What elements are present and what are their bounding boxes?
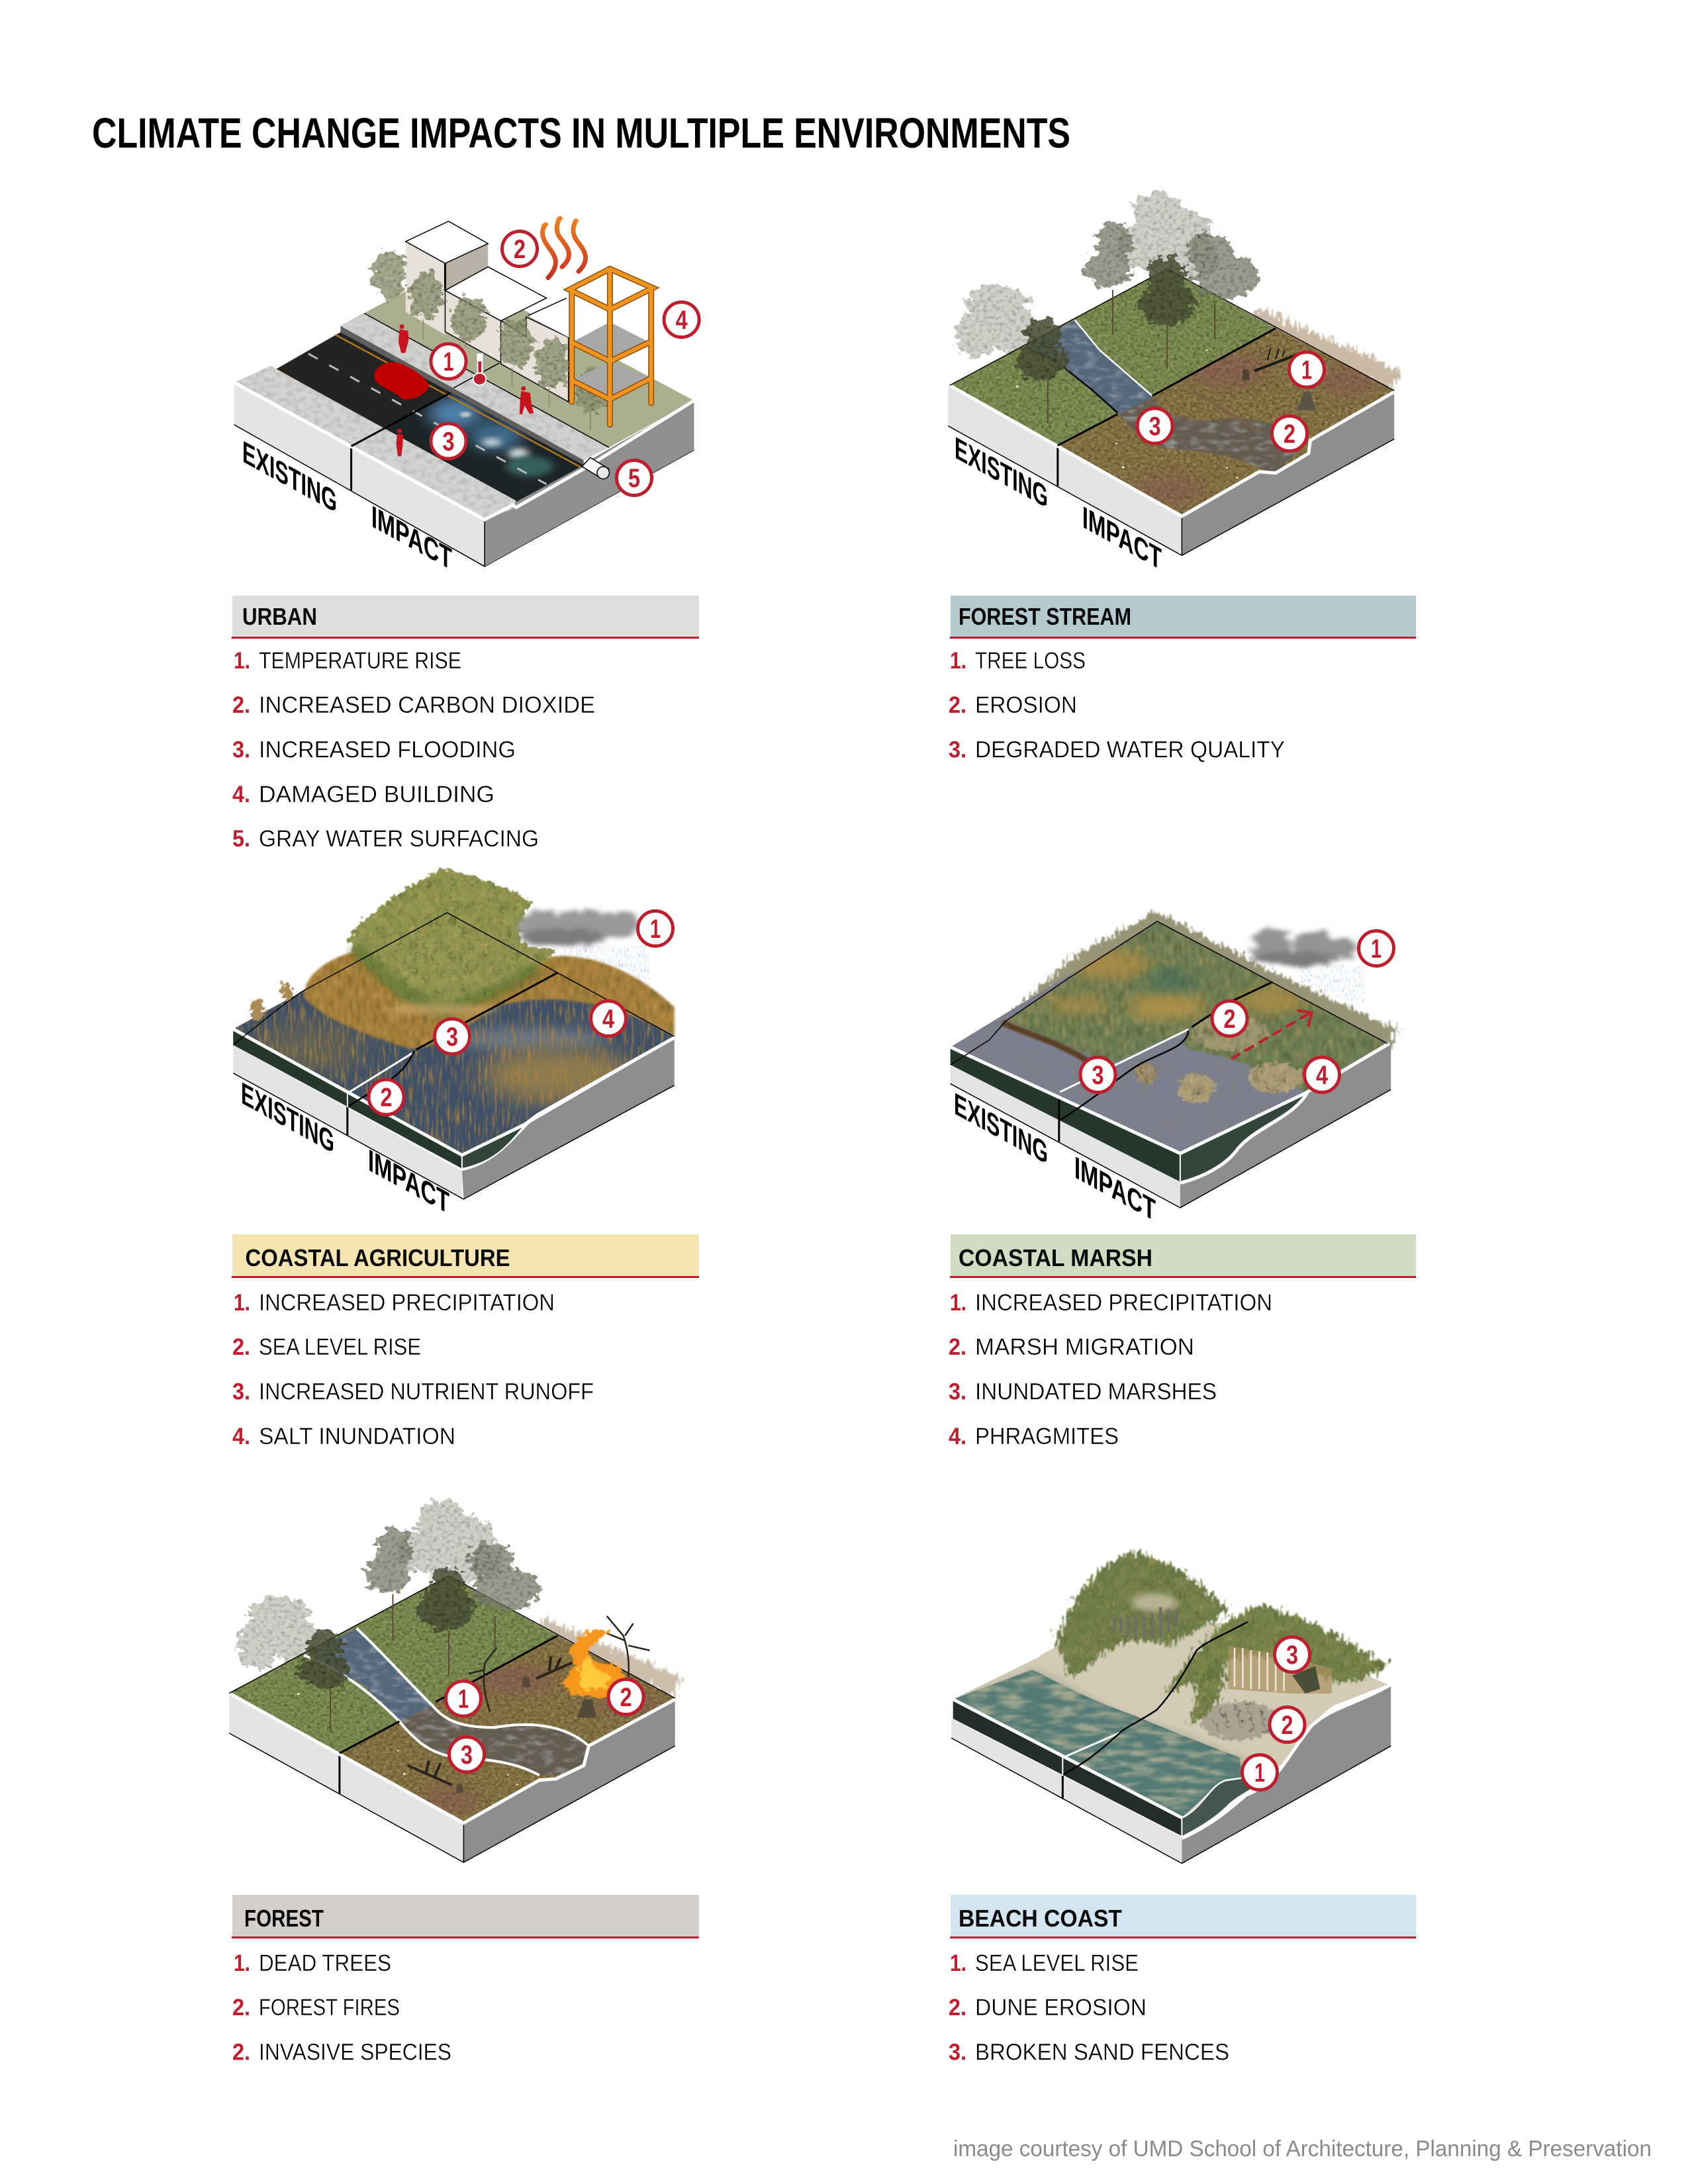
right face: forest stream bbox=[1182, 392, 1394, 555]
header band: forest stream: FOREST STREAM bbox=[959, 603, 1131, 630]
list: beach coast: BROKEN SAND FENCES bbox=[975, 2040, 1229, 2065]
water section: coastal agriculture bbox=[233, 1029, 462, 1169]
header band: beach coast: BEACH COAST bbox=[959, 1905, 1122, 1932]
right face: coastal marsh bbox=[1180, 1045, 1391, 1208]
curb bbox=[340, 326, 584, 467]
label: existing: EXISTING bbox=[954, 1086, 1048, 1171]
list: forest stream: DEGRADED WATER QUALITY bbox=[975, 737, 1285, 762]
header band: coastal agriculture bbox=[232, 1234, 699, 1278]
header band: urban bbox=[232, 596, 699, 639]
list: beach coast: DUNE EROSION bbox=[975, 1995, 1147, 2021]
list: forest stream: 2. bbox=[949, 692, 966, 718]
list: forest stream: TREE LOSS bbox=[975, 648, 1086, 674]
rain cloud bbox=[518, 909, 640, 946]
marker 4: 4 bbox=[1316, 1061, 1329, 1090]
list: urban: 1. bbox=[234, 648, 250, 674]
background faded trees bbox=[955, 192, 1220, 358]
erosion patch bbox=[1200, 1702, 1279, 1741]
marsh water bbox=[947, 919, 1391, 1156]
marker 5 bbox=[617, 461, 651, 495]
fallen logs and stumps bbox=[1194, 347, 1316, 430]
marker 2: 2 bbox=[380, 1083, 392, 1113]
middle and foreground trees bbox=[298, 1528, 539, 1731]
list: forest stream bbox=[949, 648, 1285, 762]
list: urban: 4. bbox=[232, 782, 250, 807]
back fence bbox=[1114, 1607, 1177, 1640]
marker 3 bbox=[434, 1019, 470, 1054]
block diagram: coastal marsh bbox=[947, 911, 1399, 1208]
surface with water and marsh bbox=[233, 990, 674, 1153]
list: coastal marsh: MARSH MIGRATION bbox=[975, 1334, 1194, 1360]
phragmites clumps bbox=[1134, 1015, 1303, 1104]
sand bbox=[950, 1621, 1391, 1821]
middle and foreground trees bbox=[1015, 222, 1259, 424]
marker 3: 3 bbox=[461, 1741, 473, 1770]
marker 2 bbox=[1270, 1707, 1305, 1742]
label: impact: IMPACT bbox=[371, 499, 452, 577]
marker 2: 2 bbox=[620, 1683, 632, 1712]
thermometer bbox=[473, 353, 486, 385]
panel: forest bbox=[229, 1500, 699, 2065]
impact ground bbox=[337, 1633, 679, 1824]
front fence bbox=[1228, 1646, 1332, 1694]
image credit: image courtesy of UMD School of Architecture, Planning & Preservation bbox=[953, 2136, 1652, 2161]
marker 5: 5 bbox=[628, 464, 640, 493]
header band: forest stream bbox=[950, 596, 1416, 639]
list: coastal marsh: 2. bbox=[949, 1334, 966, 1360]
list: urban: INCREASED CARBON DIOXIDE bbox=[259, 692, 595, 718]
panel: coastal agriculture bbox=[232, 868, 699, 1449]
list: forest: INVASIVE SPECIES bbox=[259, 2040, 451, 2065]
stream: impact bbox=[1119, 397, 1309, 473]
list: coastal agriculture: 1. bbox=[234, 1290, 250, 1316]
list: coastal marsh bbox=[949, 1290, 1272, 1449]
marker 4: 4 bbox=[602, 1005, 615, 1034]
list: coastal agriculture: 3. bbox=[232, 1379, 250, 1404]
marker 2 bbox=[369, 1079, 404, 1115]
list: urban: 5. bbox=[232, 826, 250, 852]
background faded trees bbox=[236, 1500, 502, 1668]
grass fringe bbox=[1249, 308, 1401, 390]
label: impact: IMPACT bbox=[1074, 1150, 1156, 1228]
concrete strip bbox=[234, 365, 516, 520]
corn shadow rows bbox=[353, 946, 538, 1011]
marker 4: 4 bbox=[676, 306, 688, 335]
marker 3: 3 bbox=[442, 428, 454, 457]
list: forest stream: 1. bbox=[950, 648, 966, 674]
list: forest: 2. bbox=[232, 1995, 250, 2021]
list: forest: 2. bbox=[232, 2040, 250, 2065]
grass fringe bbox=[534, 1619, 681, 1697]
list: urban bbox=[232, 648, 595, 852]
marker 3 bbox=[1275, 1637, 1309, 1672]
back dune grass bbox=[1055, 1552, 1230, 1678]
header band: coastal agriculture: COASTAL AGRICULTURE bbox=[245, 1244, 510, 1271]
list: coastal agriculture: INCREASED NUTRIENT RUNOFF bbox=[259, 1379, 594, 1404]
list: coastal marsh: 3. bbox=[949, 1379, 966, 1404]
list: urban: 3. bbox=[232, 737, 250, 762]
marker 3 bbox=[431, 424, 466, 459]
stumps bbox=[456, 1677, 596, 1792]
heat arrow heads bbox=[540, 216, 580, 226]
heat waves bbox=[543, 218, 586, 278]
list: forest bbox=[232, 1950, 451, 2065]
brown marsh bbox=[304, 950, 675, 1048]
existing ground bbox=[229, 1576, 557, 1753]
marker 1: 1 bbox=[650, 915, 661, 944]
marsh grass bbox=[1006, 921, 1387, 1093]
marker 1: 1 bbox=[1371, 934, 1382, 964]
marker 1: 1 bbox=[458, 1685, 469, 1714]
panel: beach coast bbox=[949, 1552, 1416, 2065]
stream: impact bbox=[399, 1706, 588, 1775]
marker 1: 1 bbox=[1301, 356, 1312, 385]
left face: urban bbox=[234, 383, 485, 567]
marker 4 bbox=[1304, 1058, 1340, 1092]
list: urban: TEMPERATURE RISE bbox=[259, 648, 461, 674]
list: forest: 1. bbox=[234, 1950, 250, 1976]
shallow water edge bbox=[953, 1667, 1246, 1818]
list: coastal agriculture: SEA LEVEL RISE bbox=[259, 1334, 421, 1360]
road bbox=[276, 332, 584, 502]
marker 3: 3 bbox=[1286, 1641, 1298, 1670]
marker 3: 3 bbox=[1092, 1061, 1104, 1090]
label: impact: IMPACT bbox=[1082, 500, 1162, 577]
marker 4 bbox=[590, 1001, 626, 1036]
front dune grass bbox=[1167, 1605, 1387, 1725]
left face: forest bbox=[229, 1693, 463, 1862]
list: coastal agriculture bbox=[232, 1290, 594, 1449]
green ground bbox=[364, 269, 694, 447]
dead trees and logs bbox=[408, 1616, 649, 1785]
stream: existing bbox=[1024, 320, 1152, 416]
block diagram: coastal agriculture bbox=[232, 868, 676, 1199]
list: beach coast: 3. bbox=[949, 2040, 966, 2065]
header band: coastal marsh bbox=[950, 1234, 1416, 1278]
marker 1 bbox=[431, 344, 466, 379]
list: coastal agriculture: 2. bbox=[232, 1334, 250, 1360]
list: forest: DEAD TREES bbox=[259, 1950, 391, 1976]
list: forest stream: 3. bbox=[949, 737, 966, 762]
marker 3 bbox=[1137, 408, 1172, 443]
marker 3 bbox=[1080, 1058, 1115, 1092]
block diagram: forest stream bbox=[948, 192, 1401, 555]
water section: coastal marsh bbox=[951, 1047, 1180, 1182]
panel: forest stream bbox=[948, 192, 1416, 762]
marker 2: 2 bbox=[1223, 1005, 1235, 1034]
list: beach coast: 2. bbox=[949, 1995, 966, 2021]
marker 1 bbox=[1289, 352, 1324, 387]
pedestrians bbox=[396, 324, 534, 456]
soil under corn bbox=[387, 1003, 498, 1015]
left face: coastal marsh bbox=[951, 1065, 1180, 1208]
right face: forest bbox=[463, 1700, 675, 1862]
sloped section: coastal agriculture bbox=[462, 1124, 524, 1168]
label: existing: EXISTING bbox=[241, 1075, 334, 1160]
car in red bbox=[374, 362, 429, 400]
list: coastal marsh: INCREASED PRECIPITATION bbox=[975, 1290, 1272, 1316]
flood water bbox=[416, 393, 583, 502]
rain bbox=[561, 946, 649, 987]
panel: urban bbox=[232, 216, 699, 852]
list: forest stream: EROSION bbox=[975, 692, 1077, 718]
boundary line bbox=[1063, 1621, 1248, 1774]
header band: beach coast bbox=[950, 1895, 1416, 1938]
corn field bbox=[347, 868, 556, 1012]
left face: coastal agriculture bbox=[233, 1045, 462, 1199]
water section: beach coast bbox=[953, 1700, 1182, 1836]
list: coastal marsh: 1. bbox=[950, 1290, 966, 1316]
marker 1 bbox=[1242, 1755, 1278, 1790]
right face: beach coast bbox=[1182, 1684, 1391, 1864]
list: urban: 2. bbox=[232, 692, 250, 718]
panel: coastal marsh bbox=[947, 911, 1416, 1449]
list: coastal agriculture: 4. bbox=[232, 1424, 250, 1449]
grass fringe bbox=[1006, 911, 1399, 1047]
marker 2 bbox=[1212, 1001, 1247, 1036]
list: urban: GRAY WATER SURFACING bbox=[259, 826, 539, 852]
sloped section: coastal marsh bbox=[1180, 1093, 1305, 1181]
marker 3: 3 bbox=[446, 1023, 458, 1052]
list: beach coast: 1. bbox=[950, 1950, 966, 1976]
sidewalk bbox=[340, 313, 609, 460]
shore mud bbox=[1002, 1023, 1088, 1062]
stream: existing bbox=[304, 1628, 432, 1723]
marker 2: 2 bbox=[1282, 1711, 1293, 1740]
marker 2 bbox=[1272, 416, 1307, 451]
marker 2 bbox=[608, 1680, 643, 1714]
fire bbox=[563, 1628, 625, 1697]
street trees bbox=[372, 250, 609, 430]
marker 2: 2 bbox=[514, 235, 526, 264]
label: existing: EXISTING bbox=[242, 434, 337, 520]
marker 1 bbox=[446, 1681, 481, 1716]
header band: coastal marsh: COASTAL MARSH bbox=[959, 1244, 1152, 1271]
right face: coastal agriculture bbox=[462, 1039, 675, 1199]
impact ground bbox=[1055, 326, 1397, 518]
list: forest: FOREST FIRES bbox=[259, 1995, 400, 2021]
migration arrow bbox=[1231, 1011, 1312, 1059]
list: coastal agriculture: INCREASED PRECIPITATION bbox=[259, 1290, 555, 1316]
marker 2: 2 bbox=[1284, 420, 1295, 449]
block diagram: forest bbox=[229, 1500, 681, 1862]
list: coastal marsh: INUNDATED MARSHES bbox=[975, 1379, 1217, 1404]
marker 1: 1 bbox=[1254, 1758, 1265, 1788]
marker 2 bbox=[502, 232, 538, 266]
marker 1 bbox=[1358, 931, 1394, 966]
list: coastal marsh: PHRAGMITES bbox=[975, 1424, 1119, 1449]
list: coastal marsh: 4. bbox=[949, 1424, 966, 1449]
list: urban: INCREASED FLOODING bbox=[259, 737, 516, 762]
block diagram: beach coast bbox=[950, 1552, 1391, 1864]
rain cloud bbox=[1252, 929, 1356, 966]
water bbox=[953, 1670, 1243, 1818]
header band: urban: URBAN bbox=[242, 603, 317, 630]
label: existing: EXISTING bbox=[955, 430, 1048, 515]
header band: forest bbox=[232, 1895, 699, 1938]
list: beach coast bbox=[949, 1950, 1229, 2065]
back sand hollow bbox=[1131, 1593, 1177, 1612]
reed clumps bbox=[250, 981, 293, 1019]
block diagram: urban bbox=[234, 216, 694, 567]
existing ground bbox=[950, 269, 1276, 445]
marker 1 bbox=[638, 911, 673, 946]
list: beach coast: SEA LEVEL RISE bbox=[975, 1950, 1139, 1976]
marker 1: 1 bbox=[444, 347, 454, 377]
drainage pipe bbox=[582, 457, 609, 479]
rain bbox=[1292, 964, 1364, 1007]
list: urban: DAMAGED BUILDING bbox=[259, 782, 494, 807]
marker 3: 3 bbox=[1149, 412, 1161, 441]
left face: forest stream bbox=[948, 385, 1182, 555]
list: coastal agriculture: SALT INUNDATION bbox=[259, 1424, 455, 1449]
sloped section: beach coast bbox=[1182, 1769, 1278, 1836]
flowers bbox=[1016, 349, 1238, 478]
marker 3 bbox=[449, 1737, 485, 1772]
flowers bbox=[297, 1693, 518, 1786]
marker 4 bbox=[664, 302, 699, 338]
buildings bbox=[406, 221, 651, 402]
label: impact: IMPACT bbox=[368, 1142, 449, 1221]
header band: forest: FOREST bbox=[244, 1905, 324, 1932]
right face: urban bbox=[485, 400, 694, 567]
left face: beach coast bbox=[951, 1719, 1182, 1864]
title: CLIMATE CHANGE IMPACTS IN MULTIPLE ENVIRONMENTS bbox=[92, 109, 1070, 157]
damaged tower bbox=[569, 269, 653, 425]
